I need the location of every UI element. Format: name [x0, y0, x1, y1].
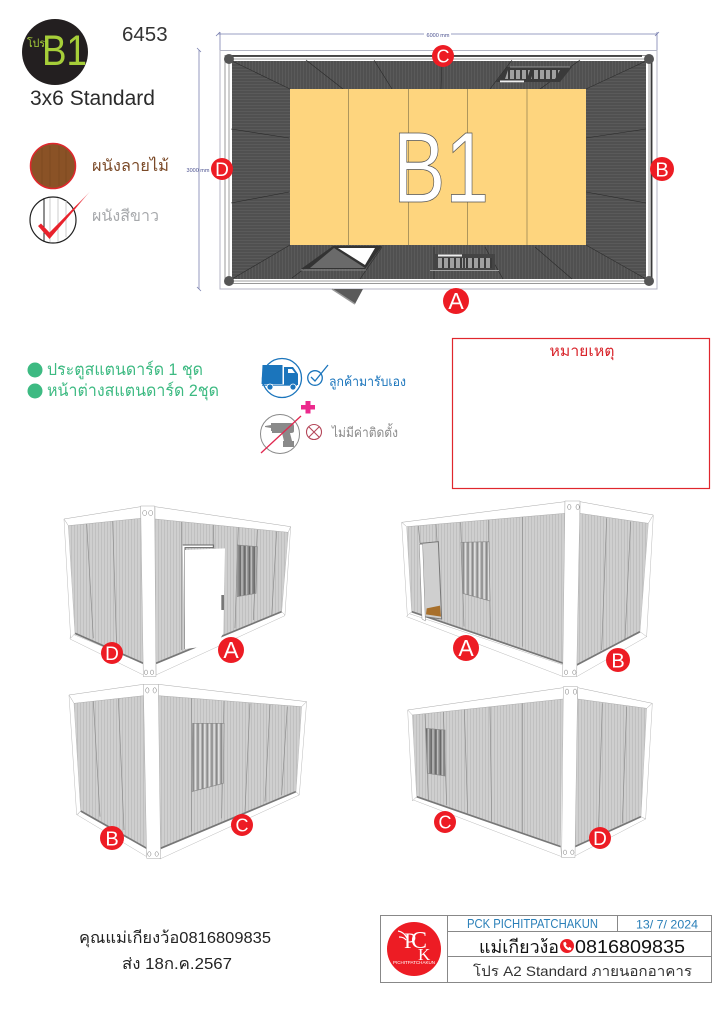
- project line: โปร A2 Standard ภายนอกอาคาร: [473, 963, 693, 979]
- title block: [380, 916, 712, 982]
- promo badge B1: [22, 19, 88, 85]
- promo badge B1: โปร: [27, 36, 45, 50]
- badge D: D: [215, 160, 229, 181]
- icon: truck pickup: [262, 358, 302, 398]
- badge B view 2: [606, 648, 630, 672]
- container view B-C: [69, 684, 307, 859]
- legend: white wall selected: ผนังสีขาว: [92, 208, 159, 225]
- badge C view 3: C: [236, 816, 248, 836]
- door: [301, 246, 382, 304]
- dimension labels: 6000 mm: [427, 33, 450, 39]
- badge A: A: [448, 288, 464, 314]
- badge C view 3: [231, 814, 253, 836]
- badge C view 4: [434, 811, 456, 833]
- badge C: C: [436, 46, 450, 66]
- customer contact: ส่ง 18ก.ค.2567: [122, 956, 232, 973]
- icon: check: [308, 365, 328, 385]
- pickup label: ลูกค้ามารับเอง: [329, 374, 406, 390]
- icon: cross: [306, 424, 322, 440]
- legend: wood wall: [30, 144, 169, 188]
- badge A: [443, 288, 469, 314]
- badge D: [211, 158, 233, 181]
- window north: [496, 67, 572, 82]
- date: 13/ 7/ 2024: [636, 918, 698, 932]
- logo: PICHITPATCHAKUN: [393, 960, 435, 965]
- customer contact: [79, 929, 271, 973]
- logo: K: [418, 945, 431, 964]
- promo badge B1: B1: [42, 27, 87, 75]
- badge A view 2: A: [458, 635, 474, 661]
- badge A view 1: [218, 637, 244, 663]
- plus sign: [301, 401, 315, 414]
- legend: white wall selected: [30, 192, 159, 243]
- wall top: [232, 61, 646, 89]
- badge B view 3: B: [105, 828, 119, 850]
- container view A-D: [64, 506, 291, 677]
- container view A-B: [402, 501, 653, 677]
- company name: PCK PICHITPATCHAKUN: [467, 917, 598, 931]
- badge D view 1: [101, 642, 123, 665]
- corners: [224, 54, 654, 286]
- badge C view 4: C: [438, 812, 452, 832]
- logo: C: [411, 928, 427, 954]
- badge B view 2: B: [611, 650, 625, 672]
- container view C-D: [408, 687, 652, 858]
- badge C: [432, 45, 454, 67]
- logo: P: [404, 928, 416, 953]
- notes box: หมายเหตุ: [550, 343, 614, 361]
- badge B view 3: [100, 826, 124, 850]
- floor plan: [187, 32, 659, 304]
- customer contact: คุณแม่เกียงว้อ0816809835: [79, 929, 271, 948]
- code number: 6453: [122, 23, 168, 46]
- badge D view 4: [589, 827, 611, 850]
- install label: ไม่มีค่าติดตั้ง: [331, 423, 398, 440]
- wall left: [232, 61, 290, 279]
- included items list: ประตูสแตนดาร์ด 1 ชุด: [47, 360, 203, 380]
- contact name: แม่เกียวง้อ: [479, 937, 559, 957]
- legend: wood wall: ผนังลายไม้: [92, 156, 169, 175]
- floor label B1: B1: [393, 112, 489, 224]
- dimension lines: [197, 32, 659, 291]
- wall right: [586, 61, 646, 279]
- wall bottom: [232, 245, 646, 279]
- logo: [387, 922, 441, 976]
- badge B: B: [655, 160, 669, 182]
- icon: drill no install: [260, 414, 301, 454]
- wall seams: [231, 60, 646, 279]
- floor: [290, 89, 586, 245]
- badge D view 4: D: [593, 829, 607, 850]
- model title: 3x6 Standard: [30, 87, 155, 110]
- floor plan: 3000 mm: [187, 168, 210, 174]
- window south: [430, 254, 499, 270]
- badge A view 2: [453, 635, 479, 661]
- icon: phone: [560, 939, 574, 953]
- phone number: 0816809835: [575, 936, 685, 957]
- badge A view 1: A: [223, 637, 239, 663]
- badge D view 1: D: [105, 644, 119, 665]
- included items list: [28, 360, 219, 401]
- notes box: [452, 338, 710, 488]
- badge B: [650, 157, 674, 182]
- included items list: หน้าต่างสแตนดาร์ด 2ชุด: [47, 381, 219, 401]
- outer frame: [220, 50, 657, 289]
